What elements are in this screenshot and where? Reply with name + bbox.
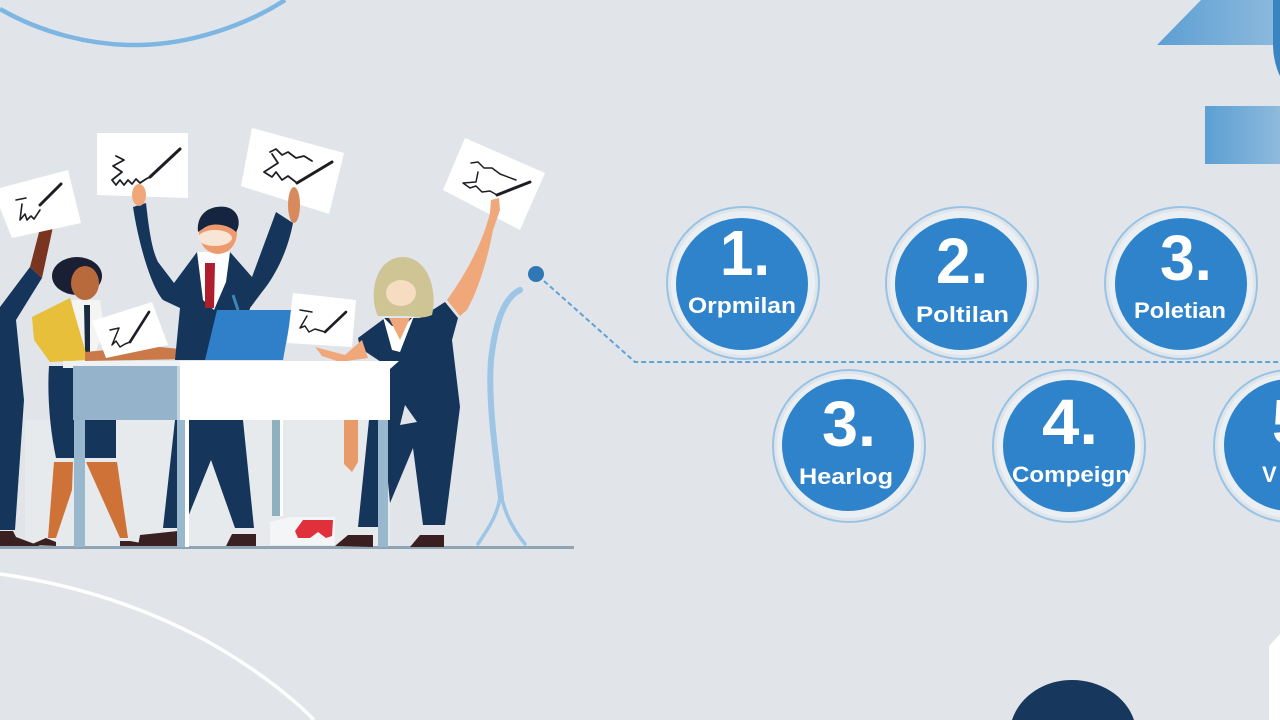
- floor line: [0, 546, 574, 549]
- person: blonde woman: [315, 198, 500, 547]
- step circle: 2: [886, 207, 1038, 359]
- step circle: 5: [1214, 370, 1280, 522]
- step circle: 1: [667, 207, 819, 359]
- sign: small paper on desk: [287, 293, 356, 347]
- dashed connector line: [528, 266, 1280, 362]
- step circle: 2: Poltilan: [916, 302, 1009, 327]
- step circle: 3 upper: Poletian: [1134, 298, 1226, 323]
- desk: [63, 361, 399, 547]
- sign: far left paper: [0, 170, 81, 238]
- decorative arc: top left: [0, 0, 285, 45]
- person: woman with yellow folder: [30, 257, 190, 546]
- sign: third paper: [241, 128, 344, 214]
- step circle: 2: 2.: [936, 225, 988, 297]
- step circle: 4: 4.: [1042, 386, 1098, 458]
- shape: right rectangle: [1205, 106, 1280, 164]
- step circle: 3 upper: [1105, 207, 1257, 359]
- sign: fourth paper: [443, 138, 545, 230]
- person: far left: [0, 213, 56, 546]
- person: man with raised arms: [132, 184, 300, 546]
- step circle: 4: [993, 370, 1145, 522]
- step circle: 3 lower: 3.: [822, 388, 876, 460]
- step circle: 3 lower: Hearlog: [799, 464, 893, 489]
- shape: bottom right white block: [1269, 634, 1280, 720]
- illustration: people holding signed papers around a desk: [0, 128, 545, 547]
- icon: laptop: [205, 295, 292, 360]
- decorative arc: bottom left: [0, 574, 314, 720]
- icon: red and white item on floor: [270, 517, 335, 545]
- shape: top right triangle: [1157, 0, 1280, 45]
- step circle: 1: 1.: [720, 217, 770, 289]
- step circle: 3 lower: [773, 370, 925, 522]
- sign: paper held by woman: [92, 302, 168, 358]
- shape: bottom navy circle: [1012, 680, 1134, 720]
- icon: light blue stand: [478, 290, 525, 544]
- sign: second paper: [97, 133, 188, 198]
- step circle: 3 upper: 3.: [1160, 222, 1212, 294]
- lighter floor area under desk: [25, 420, 390, 546]
- step circle: 4: Compeign: [1012, 462, 1130, 487]
- step circle: 1: Orpmilan: [688, 293, 796, 318]
- shape: top right dark bar: [1273, 0, 1280, 76]
